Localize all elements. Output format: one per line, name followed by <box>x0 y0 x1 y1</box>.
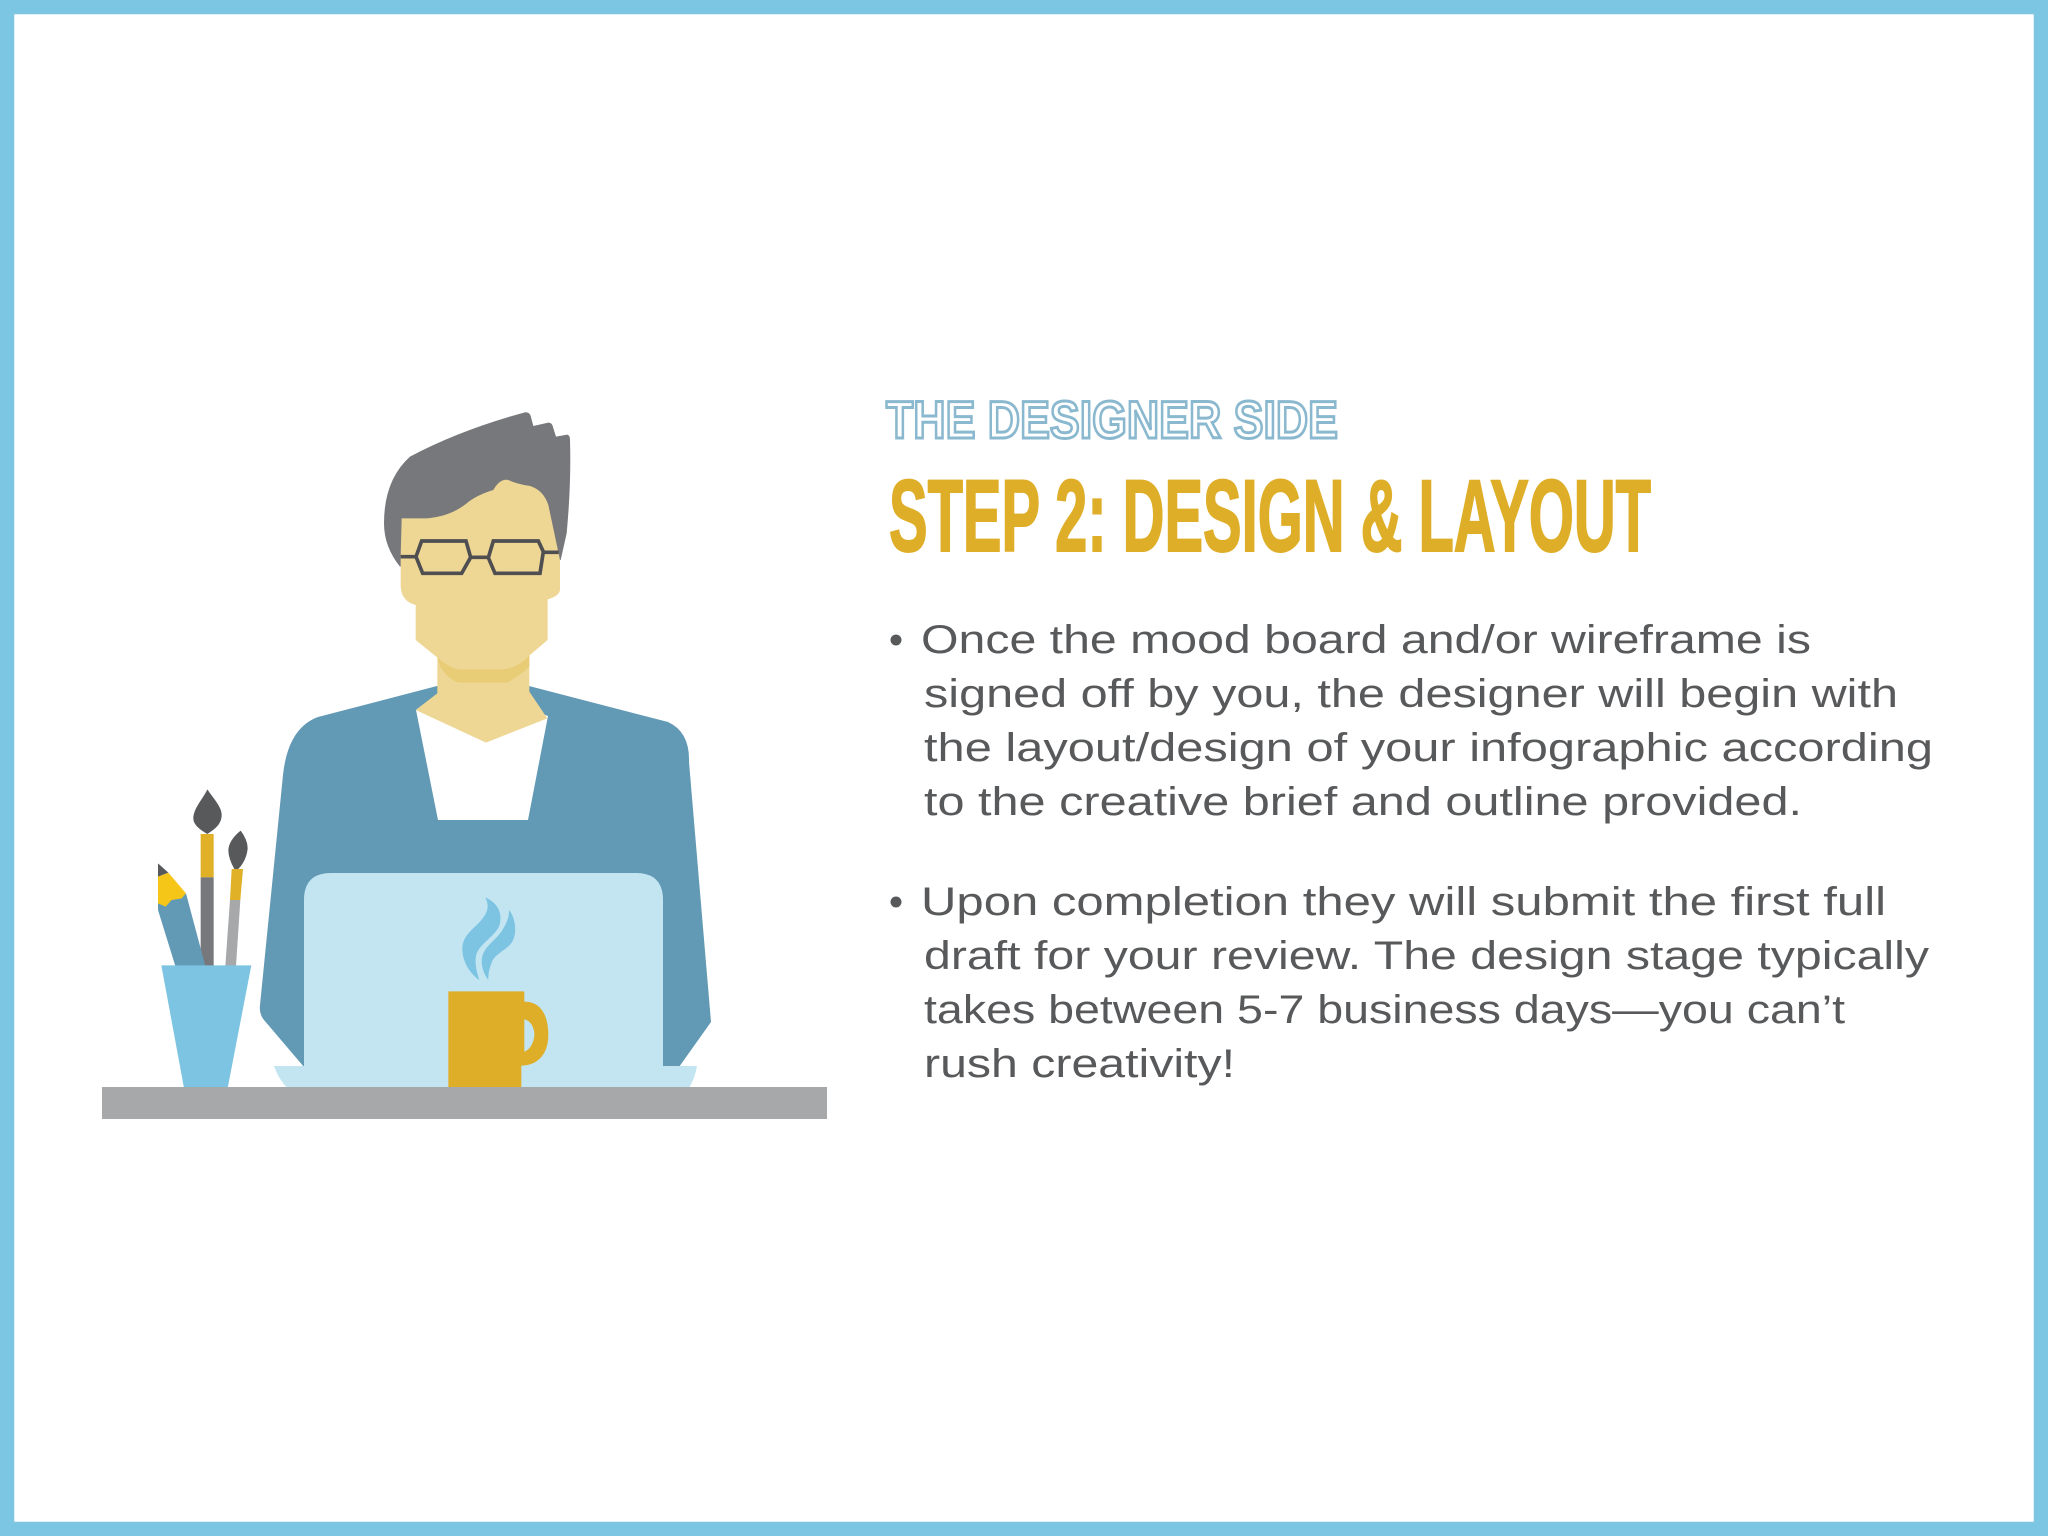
desk <box>102 1087 827 1119</box>
large brush <box>193 789 222 966</box>
steam <box>462 897 501 980</box>
hair <box>384 412 570 567</box>
cup <box>161 965 251 1088</box>
mug <box>448 991 548 1088</box>
illustration: designer at desk <box>102 412 827 1119</box>
neck <box>416 653 547 743</box>
pencil cup with brushes <box>158 789 251 1088</box>
pencil <box>158 863 205 966</box>
laptop screen <box>304 873 663 1088</box>
bullet text block 1 <box>890 618 1933 824</box>
coffee mug with steam <box>448 897 548 1088</box>
bullet text block 2: takes between 5-7 business days—you can’t <box>924 988 1845 1032</box>
glasses <box>401 541 559 573</box>
shirt <box>416 690 548 820</box>
designer sweater <box>260 686 711 1067</box>
eyebrow heading: THE DESIGNER SIDE <box>886 391 1338 450</box>
bullet text block 2 <box>890 880 1929 1086</box>
jaw shadow <box>437 655 529 683</box>
face <box>401 480 560 669</box>
bullet text block 2: Upon completion they will submit the first full <box>921 880 1886 924</box>
bullet text block 1: to the creative brief and outline provided. <box>924 780 1802 824</box>
bullet text block 2: draft for your review. The design stage typically <box>924 934 1929 978</box>
bullet text block 1: signed off by you, the designer will begin with <box>924 672 1898 716</box>
bullet text block 1: Once the mood board and/or wireframe is <box>921 618 1811 662</box>
bullet text block 2: rush creativity! <box>924 1042 1235 1086</box>
head <box>384 412 570 743</box>
small brush <box>225 831 248 966</box>
laptop base <box>274 1066 697 1088</box>
bullet text block 1: the layout/design of your infographic according <box>924 726 1933 770</box>
